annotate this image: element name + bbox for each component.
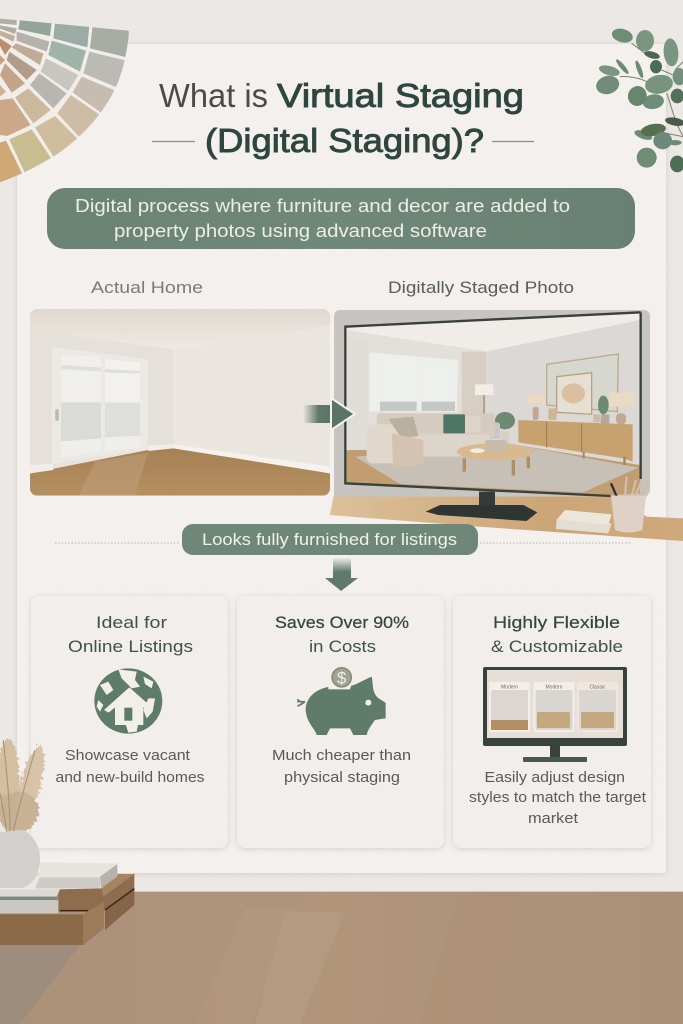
card title — [275, 613, 409, 656]
pencils — [611, 483, 617, 496]
icon: piggy bank: $ — [337, 668, 346, 687]
style tile: classic — [577, 682, 618, 732]
icon: eucalyptus branch — [594, 26, 683, 172]
pencil cup — [611, 496, 646, 532]
card title — [491, 613, 623, 656]
card title: Highly Flexible — [493, 613, 620, 632]
photo: empty room — [30, 309, 330, 496]
card text: market — [528, 810, 579, 827]
card title: Ideal for — [96, 613, 167, 632]
definition banner — [47, 188, 635, 249]
callout: looks fully furnished — [182, 524, 478, 555]
callout: looks fully furnished: Looks fully furnished for listings — [202, 530, 457, 549]
decor: pampas grass — [0, 738, 50, 832]
arrow: before to after — [303, 398, 355, 430]
sofa — [367, 413, 500, 468]
title: (Digital Staging)? — [205, 122, 484, 159]
arrow: down — [325, 558, 358, 591]
monitor backing — [334, 310, 650, 502]
card text — [56, 747, 204, 786]
icon: piggy bank — [297, 668, 386, 735]
monitor bezel — [345, 312, 641, 496]
swatch cells — [0, 19, 132, 185]
decor: stacked books and crates — [0, 862, 134, 945]
style tile: modern: Modern — [501, 684, 518, 690]
monitor: digitally staged photo — [330, 310, 683, 541]
curtains — [351, 448, 367, 450]
card: cost savings — [237, 596, 444, 848]
sliding door — [52, 347, 148, 464]
definition banner: property photos using advanced software — [114, 220, 487, 241]
title — [152, 77, 534, 159]
panel: main sheet — [17, 44, 666, 873]
desk surface — [330, 497, 683, 541]
card text: styles to match the target — [469, 789, 647, 806]
table lamps — [527, 393, 635, 424]
card text: and new-build homes — [56, 769, 204, 786]
style tile: modern — [489, 682, 530, 732]
card title: Online Listings — [68, 637, 193, 656]
card text — [272, 747, 411, 786]
coffee table — [457, 440, 533, 476]
card: flexible — [453, 596, 651, 848]
lower crate — [0, 902, 104, 945]
floor — [0, 891, 683, 1024]
floor lamp — [475, 384, 494, 414]
card title: Saves Over 90% — [275, 613, 409, 632]
title: What is — [159, 77, 268, 114]
style tile: classic: Classic — [589, 684, 606, 690]
decor: ceramic vase — [0, 830, 40, 888]
monitor stand — [426, 492, 537, 521]
upper crate — [58, 873, 134, 930]
pencil set — [625, 477, 649, 496]
dotted divider — [55, 542, 632, 544]
title: Virtual Staging — [277, 77, 524, 114]
staged room scene — [345, 313, 640, 497]
card text: Easily adjust design — [484, 769, 625, 786]
card title: in Costs — [309, 637, 376, 656]
card text: Much cheaper than — [272, 747, 411, 764]
plant — [495, 412, 515, 444]
card title — [68, 613, 193, 656]
wall art — [547, 354, 618, 414]
sideboard — [518, 420, 633, 465]
label: digitally staged photo: Digitally Staged Photo — [388, 278, 574, 297]
rug — [355, 445, 638, 492]
card title: & Customizable — [491, 637, 623, 656]
card text — [469, 769, 647, 827]
definition banner: Digital process where furniture and decor are added to — [75, 195, 570, 216]
card: online listings — [31, 596, 228, 848]
window — [369, 352, 458, 412]
icon: globe with house — [94, 668, 162, 734]
label: actual home: Actual Home — [91, 278, 203, 297]
card text: Showcase vacant — [65, 747, 191, 764]
books — [556, 510, 612, 533]
white book — [35, 862, 117, 888]
style tile: modern furnished — [534, 682, 574, 732]
icon: paint swatch fan — [0, 18, 132, 185]
small books — [0, 889, 60, 913]
style tile: modern furnished: Modern — [546, 684, 563, 690]
icon: monitor with style options — [483, 667, 627, 762]
card text: physical staging — [284, 769, 400, 786]
